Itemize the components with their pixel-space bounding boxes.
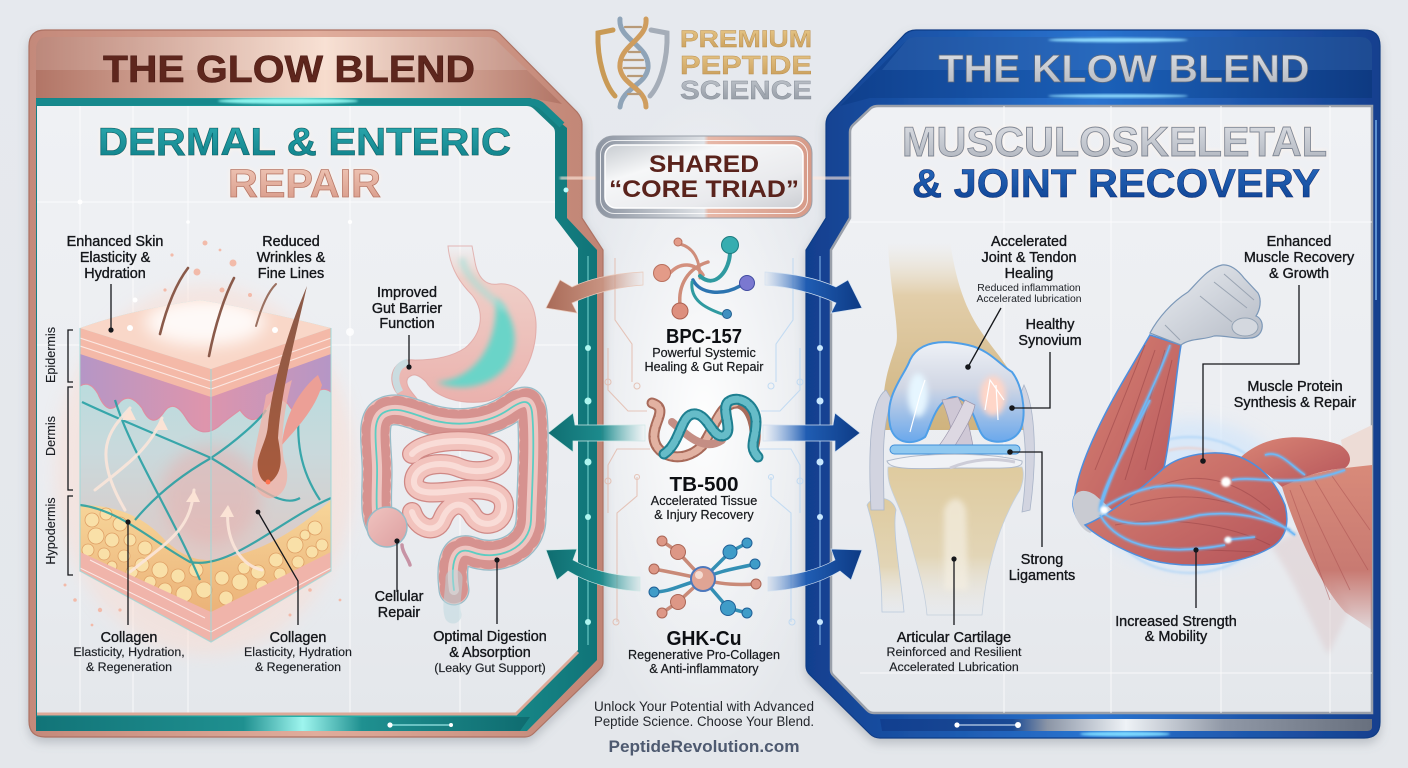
callout: healthy synovium: Healthy — [1026, 317, 1075, 333]
cruciate ligaments — [942, 397, 975, 457]
callout: collagen right — [244, 510, 352, 674]
callout: enhanced skin elasticity — [67, 234, 163, 333]
heading: musculoskeletal and joint recovery — [902, 118, 1327, 206]
logo: premium peptide science: SCIENCE — [680, 75, 812, 105]
arrow: tb-500 to klow — [763, 413, 860, 452]
fibula — [867, 498, 904, 612]
text: ghk-cu: Regenerative Pro-Collagen — [628, 648, 780, 662]
callout: accelerated joint and tendon healing: Healing — [1005, 266, 1053, 282]
text: bpc-157 — [644, 326, 764, 374]
labels: skin layer brackets: Hypodermis — [44, 497, 58, 565]
heading: dermal and enteric repair — [98, 121, 511, 206]
callout: enhanced skin elasticity: Elasticity & — [80, 250, 151, 266]
callout: enhanced muscle recovery — [1200, 234, 1355, 464]
callout: collagen right: & Regeneration — [255, 660, 341, 674]
callout: increased strength: Increased Strength — [1115, 614, 1237, 630]
callout: enhanced muscle recovery: Enhanced — [1267, 234, 1331, 250]
callout: healthy synovium: Synovium — [1018, 333, 1082, 349]
illustration: stomach — [392, 246, 536, 408]
panel: klow blend frame — [806, 30, 1380, 738]
labels: glow blend callouts — [67, 234, 547, 675]
callout: shared core triad — [560, 110, 850, 240]
illustration: flexed arm — [1073, 265, 1372, 655]
callout: improved gut barrier: Function — [379, 316, 435, 332]
icon: ghk-cu molecule — [649, 536, 761, 618]
callout: muscle protein synthesis: Muscle Protein — [1247, 379, 1343, 395]
panel: glow blend frame — [29, 30, 603, 737]
side ligaments — [870, 390, 892, 510]
text: bpc-157: Healing & Gut Repair — [644, 360, 764, 374]
callout: accelerated joint and tendon healing: Accelerated — [991, 234, 1067, 250]
content area: glow blend — [37, 106, 578, 713]
meniscus — [890, 445, 1020, 454]
callout: enhanced skin elasticity: Enhanced Skin — [67, 234, 163, 250]
callout: increased strength — [1115, 547, 1237, 645]
callout: strong ligaments: Strong — [1021, 552, 1063, 568]
callout: strong ligaments: Ligaments — [1009, 568, 1075, 584]
deltoid — [1241, 437, 1350, 487]
heading: dermal and enteric repair: DERMAL & ENTERIC — [98, 121, 511, 164]
callout: muscle protein synthesis — [1234, 379, 1356, 411]
shoulder and back muscles — [1270, 530, 1350, 655]
callout: collagen left: Elasticity, Hydration, — [73, 645, 185, 659]
callout: reduced wrinkles: Fine Lines — [258, 266, 324, 282]
callout: articular cartilage: Articular Cartilage — [897, 630, 1011, 646]
callout: enhanced muscle recovery: Muscle Recovery — [1244, 250, 1355, 266]
text: bpc-157: BPC-157 — [666, 326, 742, 348]
icon: bpc-157 molecule — [654, 236, 754, 319]
callout: collagen left: & Regeneration — [86, 660, 172, 674]
arrow: ghk-cu to glow — [546, 549, 640, 591]
nerve lines — [1100, 345, 1345, 550]
callout: optimal digestion: (Leaky Gut Support) — [434, 661, 546, 675]
callout: shared core triad: SHARED — [649, 151, 759, 178]
text: closing message: Unlock Your Potential with Advanced — [594, 699, 814, 714]
callout: collagen left — [73, 519, 185, 674]
text: website: PeptideRevolution.com — [608, 737, 800, 756]
biceps — [1085, 453, 1287, 565]
callout: articular cartilage: Reinforced and Resilient — [886, 645, 1022, 659]
callout: articular cartilage: Accelerated Lubrication — [889, 660, 1019, 674]
arrow: bpc-157 to klow — [765, 272, 862, 313]
text: tb-500 — [651, 474, 757, 522]
callout: accelerated joint and tendon healing: Accelerated lubrication — [976, 294, 1082, 305]
illustration: knee joint — [867, 243, 1034, 615]
labels: skin layer brackets — [44, 327, 73, 575]
callout: healthy synovium — [1009, 317, 1082, 411]
icon: dna shield — [598, 19, 667, 107]
callout: muscle protein synthesis: Synthesis & Repair — [1234, 395, 1356, 411]
callout: cellular repair: Cellular — [375, 589, 424, 605]
illustration: skin cross-section — [55, 240, 355, 655]
forearm — [1073, 335, 1181, 530]
header bar: glow blend — [36, 37, 562, 104]
fist — [1150, 265, 1262, 345]
callout: reduced wrinkles: Wrinkles & — [257, 250, 326, 266]
callout: articular cartilage — [886, 556, 1022, 674]
header bar: klow blend — [840, 37, 1372, 106]
callout: accelerated joint and tendon healing: Reduced inflammation — [977, 283, 1081, 294]
text: closing message: Peptide Science. Choose Your Blend. — [594, 714, 814, 729]
callout: accelerated joint and tendon healing: Joint & Tendon — [982, 250, 1076, 266]
heading: the klow blend: THE KLOW BLEND — [938, 48, 1310, 91]
callout: accelerated joint and tendon healing — [965, 234, 1082, 370]
callout: optimal digestion: & Absorption — [449, 645, 531, 661]
text: bpc-157: Powerful Systemic — [652, 346, 756, 360]
callout: optimal digestion — [433, 557, 547, 675]
footer strip: glow blend — [36, 717, 530, 731]
arrow: tb-500 to glow — [548, 413, 645, 452]
content area: klow blend — [831, 106, 1372, 713]
arrow: bpc-157 to glow — [546, 272, 643, 313]
callout: optimal digestion: Optimal Digestion — [433, 629, 547, 645]
tibia — [888, 467, 1023, 615]
footer strip: klow blend — [880, 719, 1372, 731]
callout: collagen left: Collagen — [101, 630, 157, 646]
callout: improved gut barrier: Improved — [377, 285, 437, 301]
text: tb-500: TB-500 — [670, 474, 738, 496]
callout: reduced wrinkles: Reduced — [262, 234, 320, 250]
labels: skin layer brackets: Epidermis — [44, 327, 58, 383]
heading: musculoskeletal and joint recovery: MUSCULOSKELETAL — [902, 118, 1327, 165]
callout: increased strength: & Mobility — [1145, 629, 1208, 645]
callout: cellular repair: Repair — [378, 605, 420, 621]
callout: collagen right: Elasticity, Hydration — [244, 645, 352, 659]
heading: musculoskeletal and joint recovery: & JOINT RECOVERY — [912, 162, 1320, 206]
cartilage condyles — [889, 342, 1024, 442]
callout: collagen right: Collagen — [270, 630, 326, 646]
callout: strong ligaments — [1007, 449, 1075, 584]
logo: premium peptide science — [598, 19, 812, 107]
logo: premium peptide science: PEPTIDE — [680, 50, 812, 80]
callout: shared core triad: “CORE TRIAD” — [609, 176, 799, 203]
callout: reduced wrinkles — [257, 234, 326, 282]
callout: cellular repair — [375, 538, 424, 621]
icon: tb-500 knot — [652, 399, 758, 457]
callout: improved gut barrier — [372, 285, 442, 370]
text: closing message — [594, 699, 814, 729]
text: tb-500: & Injury Recovery — [654, 508, 754, 522]
callout: enhanced skin elasticity: Hydration — [84, 266, 146, 282]
heading: the glow blend: THE GLOW BLEND — [103, 49, 475, 91]
callout: enhanced muscle recovery: & Growth — [1269, 266, 1329, 282]
femur — [883, 243, 1025, 430]
labels: klow blend callouts — [886, 234, 1356, 674]
text: ghk-cu — [628, 628, 780, 676]
callout: improved gut barrier: Gut Barrier — [372, 301, 442, 317]
icon: arrector muscle — [282, 375, 322, 445]
text: ghk-cu: & Anti-inflammatory — [649, 662, 759, 676]
heading: dermal and enteric repair: REPAIR — [228, 162, 381, 206]
arrow: ghk-cu to klow — [768, 549, 862, 591]
logo: premium peptide science: PREMIUM — [680, 26, 812, 53]
illustration: intestines — [367, 402, 533, 615]
text: ghk-cu: GHK-Cu — [666, 628, 742, 650]
labels: skin layer brackets: Dermis — [44, 416, 58, 456]
text: tb-500: Accelerated Tissue — [651, 494, 757, 508]
